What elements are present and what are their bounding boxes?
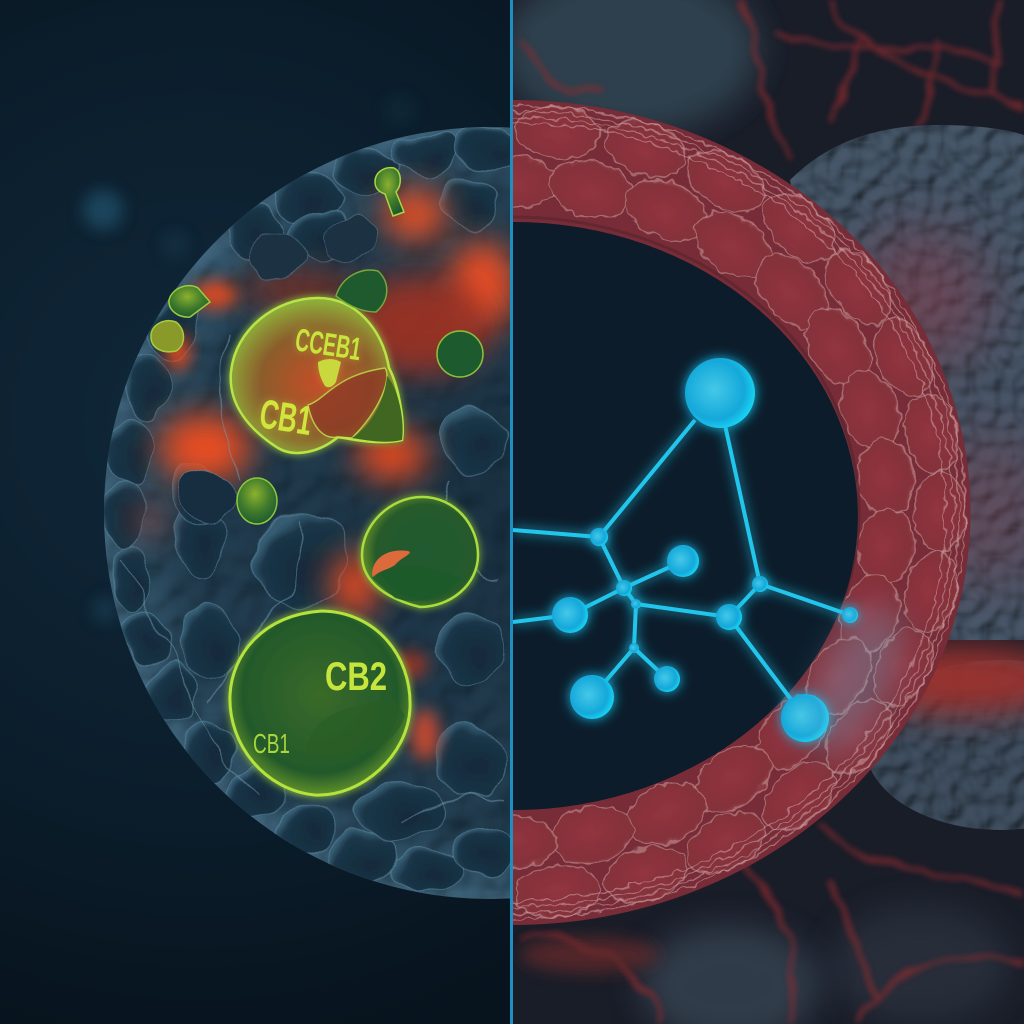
background bokeh particles bbox=[83, 95, 415, 623]
label: CB2: CB2 bbox=[325, 655, 387, 699]
network nodes bbox=[552, 358, 858, 742]
dark bulges and veins over glow bbox=[120, 220, 505, 820]
ring outer fibres bbox=[513, 104, 968, 921]
center divider bbox=[510, 0, 513, 1024]
small receptor vesicles bbox=[151, 168, 483, 524]
ring inner edge bbox=[513, 216, 860, 686]
right background bbox=[513, 0, 1024, 1024]
upper gray sphere bbox=[790, 125, 1024, 640]
label: CCEB1: CCEB1 bbox=[293, 321, 364, 367]
vessel lumen bbox=[513, 222, 858, 810]
ring cell segments bbox=[469, 102, 966, 922]
inner green pocket bbox=[352, 376, 403, 442]
molecule network bbox=[513, 358, 858, 742]
lower gray sphere bbox=[865, 660, 1024, 830]
gray tissue bottom bbox=[640, 925, 820, 1024]
vessel ring bbox=[513, 100, 970, 925]
receptor: middle vesicle bbox=[362, 497, 478, 607]
label: CB1 lower: CB1 bbox=[253, 728, 290, 759]
cell body bbox=[104, 127, 510, 899]
gray tissue top left bbox=[500, 0, 760, 135]
yellow nucleus bbox=[318, 359, 341, 387]
vesicle opening bbox=[372, 551, 410, 577]
left background bbox=[0, 114, 510, 1024]
network bonds bbox=[513, 420, 850, 718]
vesicle fold bbox=[372, 566, 462, 601]
cell edge bulges bbox=[105, 128, 524, 894]
red flame glow bottom bbox=[520, 937, 660, 973]
translucent blue haze over ring bbox=[802, 597, 914, 763]
inner fold bbox=[308, 368, 387, 438]
red glow lower right bbox=[850, 646, 1024, 714]
receptor: large upper CB1 vesicle bbox=[231, 298, 403, 453]
inflamed orange regions bbox=[136, 189, 516, 761]
label: CB1 upper: CB1 bbox=[257, 390, 315, 444]
red tissue network bbox=[520, 0, 1024, 1024]
gray tissue bottom right bbox=[830, 905, 1010, 1024]
receptor: large CB2 vesicle bbox=[230, 611, 410, 795]
vesicle fold bbox=[392, 710, 405, 736]
